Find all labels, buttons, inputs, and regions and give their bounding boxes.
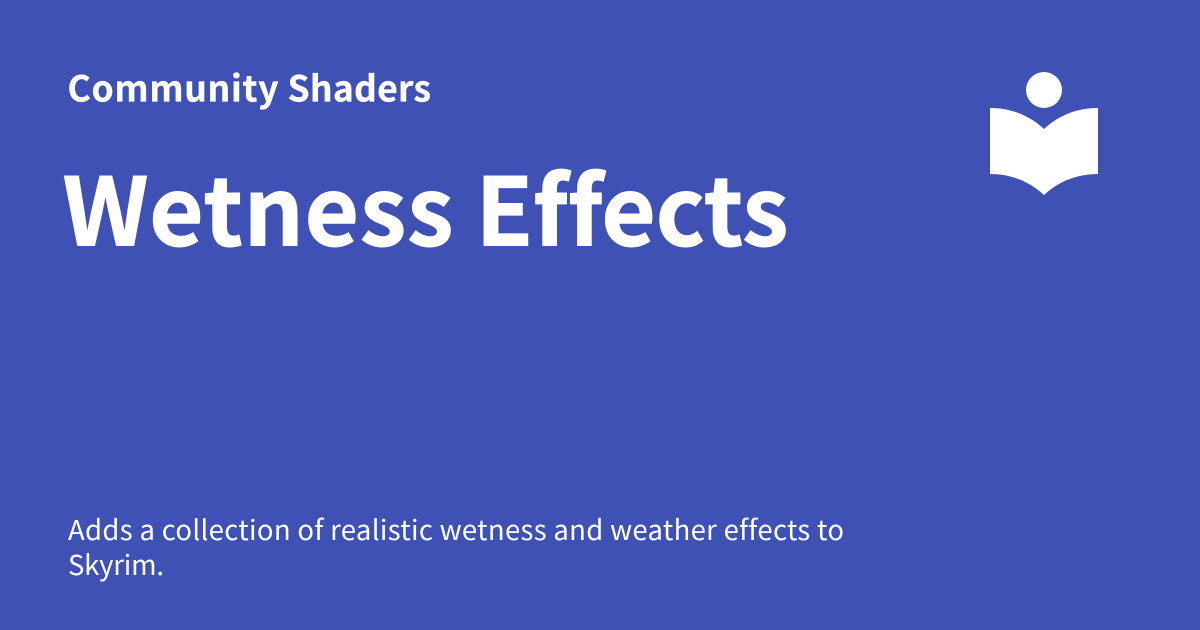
title: Effects: [476, 138, 788, 274]
title: Wetness: [62, 138, 454, 274]
site name: [68, 62, 431, 112]
site name: Shaders: [288, 62, 431, 112]
title: [62, 138, 788, 274]
description: Adds a collection of realistic wetness and weather effects to: [68, 508, 844, 548]
description: [68, 508, 844, 583]
icon: reader with open book: [990, 72, 1098, 195]
site name: Community: [68, 62, 278, 112]
description: Skyrim.: [68, 543, 164, 583]
